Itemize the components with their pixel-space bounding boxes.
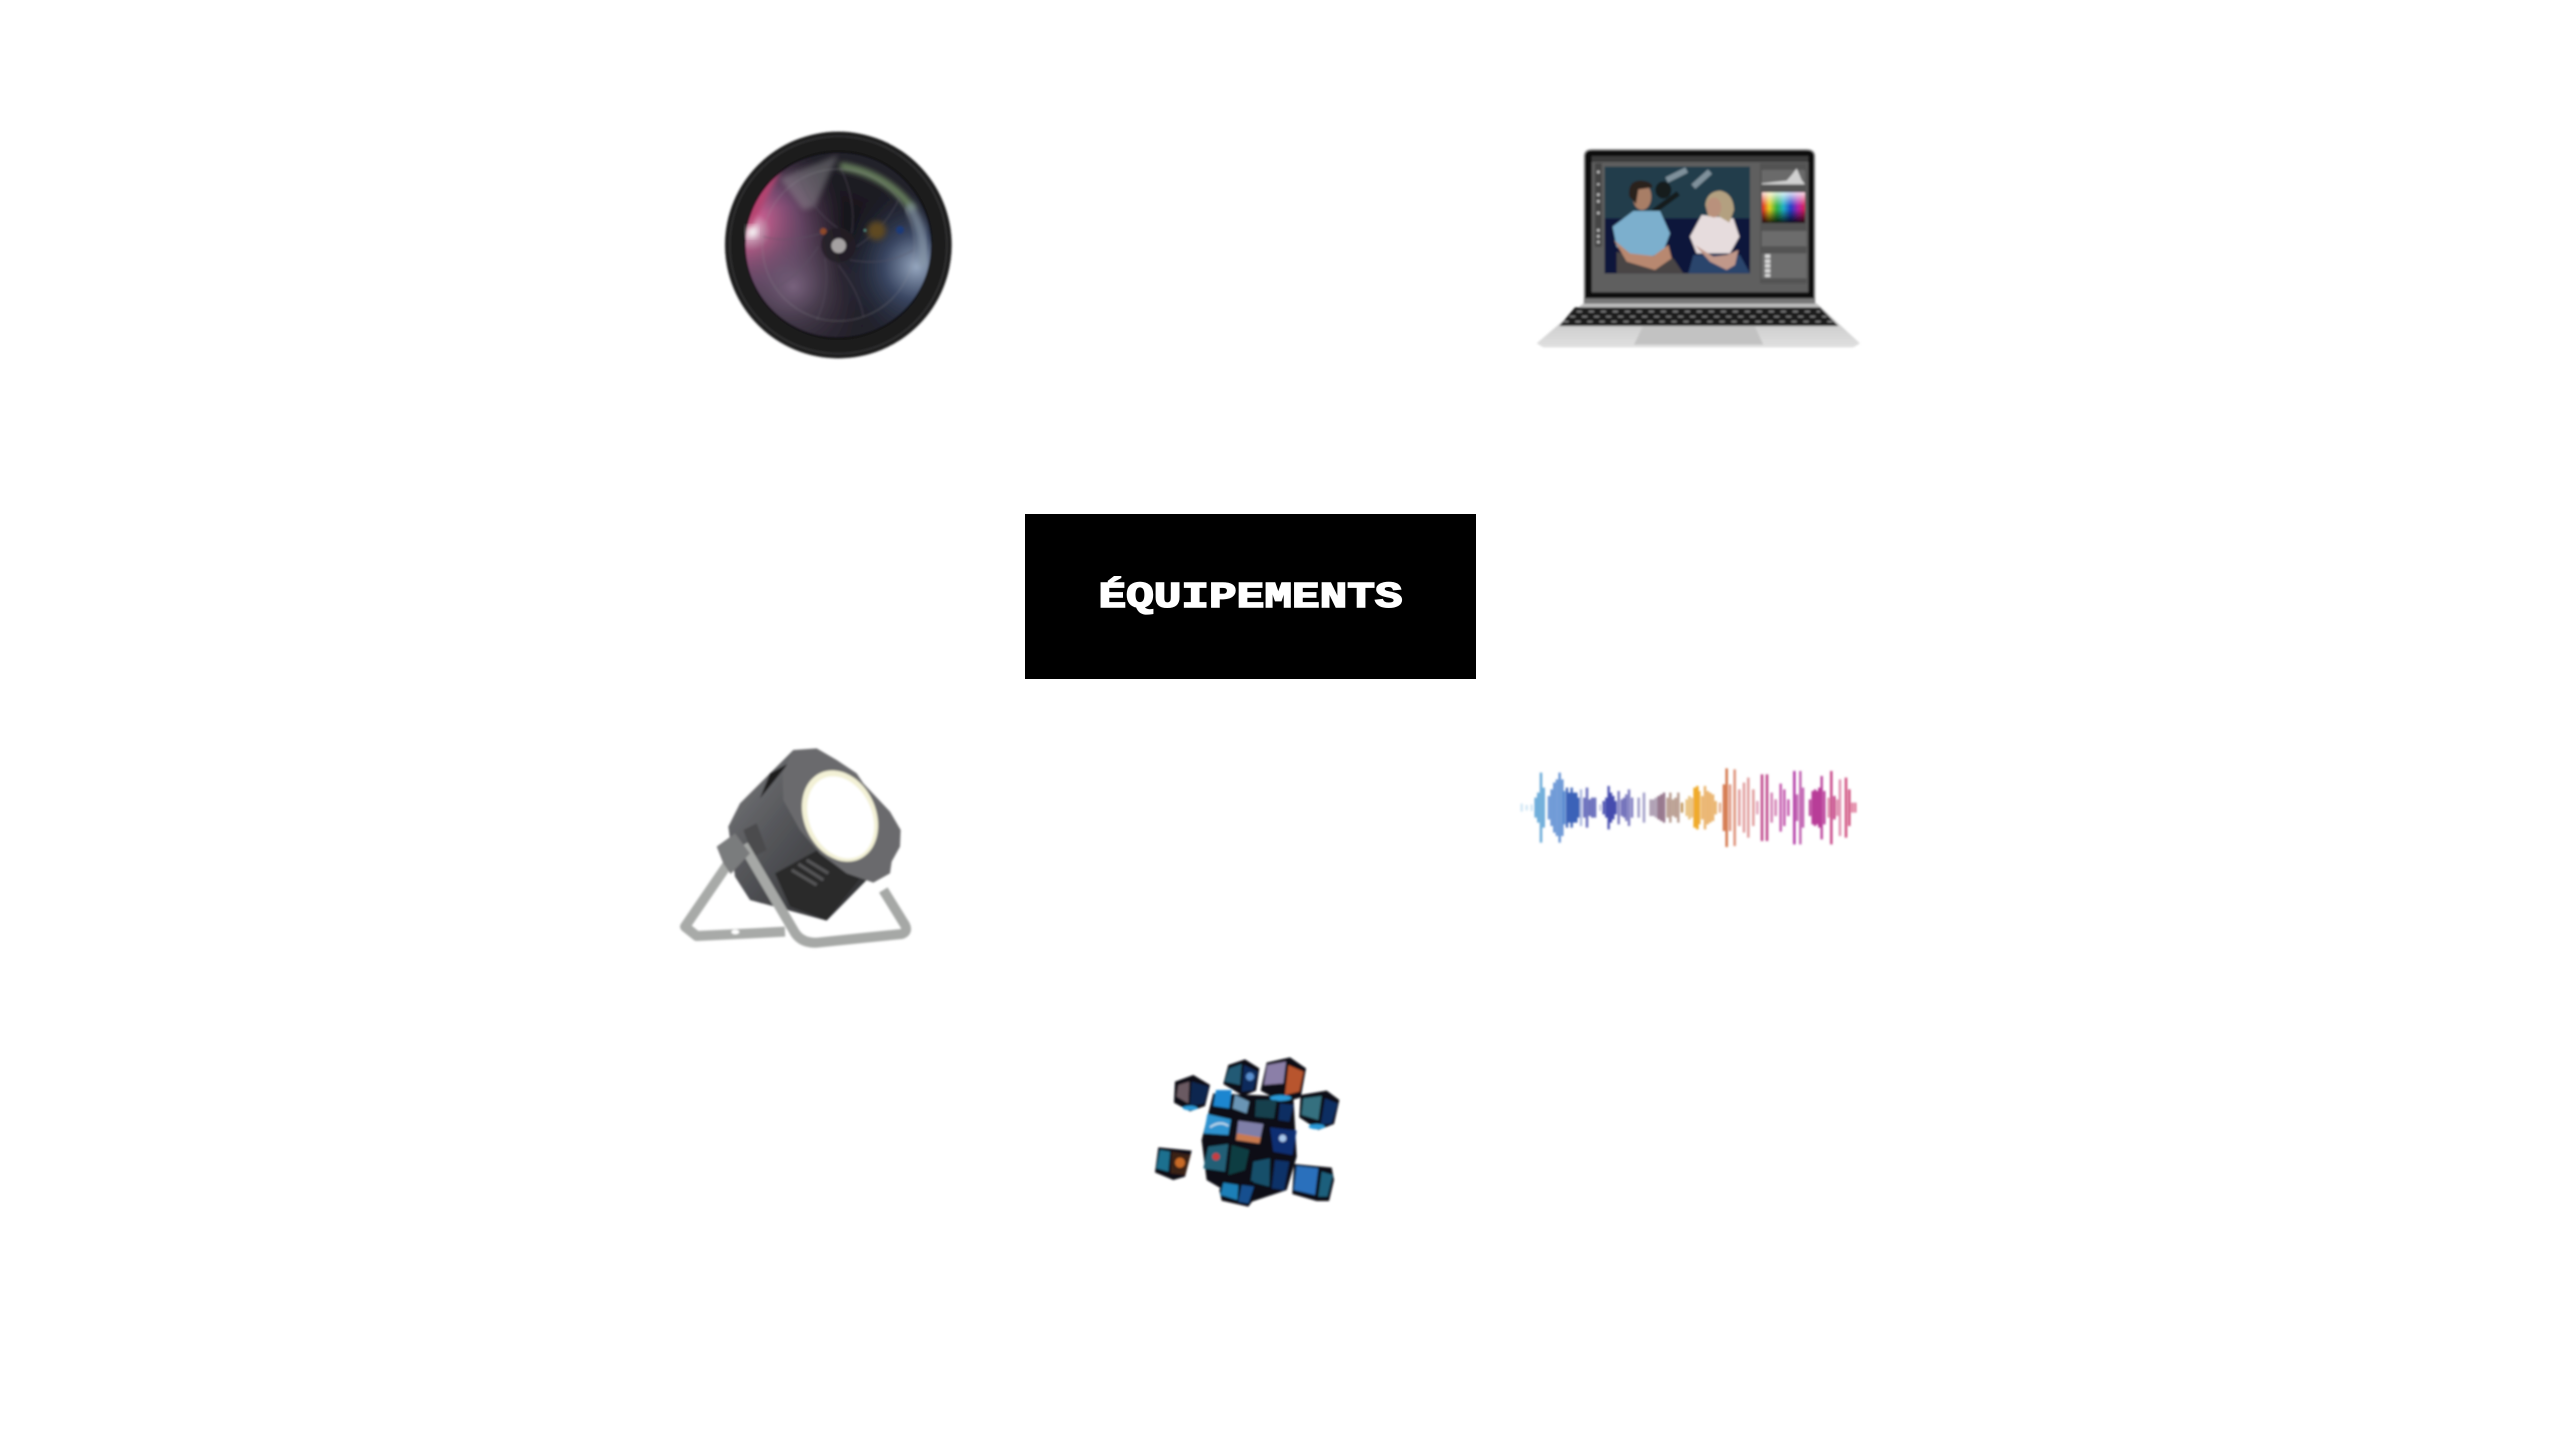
man (1613, 211, 1670, 262)
cube 2 (1223, 1059, 1259, 1096)
icon: floating media cubes (1155, 1057, 1339, 1207)
side panels (1760, 163, 1807, 283)
icon: camera lens (725, 132, 952, 358)
icon: audio waveform (1522, 768, 1855, 847)
icon: laptop with photo editor (1537, 149, 1860, 347)
cluster core shadow (1202, 1093, 1297, 1203)
laptop base (1537, 303, 1860, 347)
cube 7 (1204, 1114, 1231, 1135)
aperture blades (764, 170, 898, 316)
cube 13 (1292, 1164, 1334, 1201)
cube 14 (1219, 1179, 1256, 1207)
cube 5 (1213, 1090, 1232, 1108)
cube 8 (1236, 1121, 1263, 1143)
cube 4 (1299, 1091, 1339, 1130)
lamp body (728, 750, 867, 921)
screen bezel (1584, 149, 1815, 303)
cube 9 (1270, 1127, 1297, 1155)
heading panel: ÉQUIPEMENTS (1025, 514, 1476, 679)
cube 12 (1251, 1158, 1270, 1187)
lamp lens (788, 758, 892, 874)
photo (1605, 167, 1750, 273)
woman (1690, 215, 1739, 253)
back stand arm (685, 863, 785, 936)
front stand arm (743, 845, 906, 943)
cube 1 (1174, 1075, 1210, 1111)
heading text: ÉQUIPEMENTS (1098, 577, 1403, 618)
icon: stage spotlight (685, 748, 906, 943)
tools strip (1595, 163, 1602, 247)
front bezel (783, 748, 901, 883)
cube 6 (1255, 1100, 1277, 1118)
cube 3 (1261, 1057, 1306, 1103)
cube 10 (1203, 1144, 1228, 1172)
cube 11 (1155, 1147, 1192, 1180)
